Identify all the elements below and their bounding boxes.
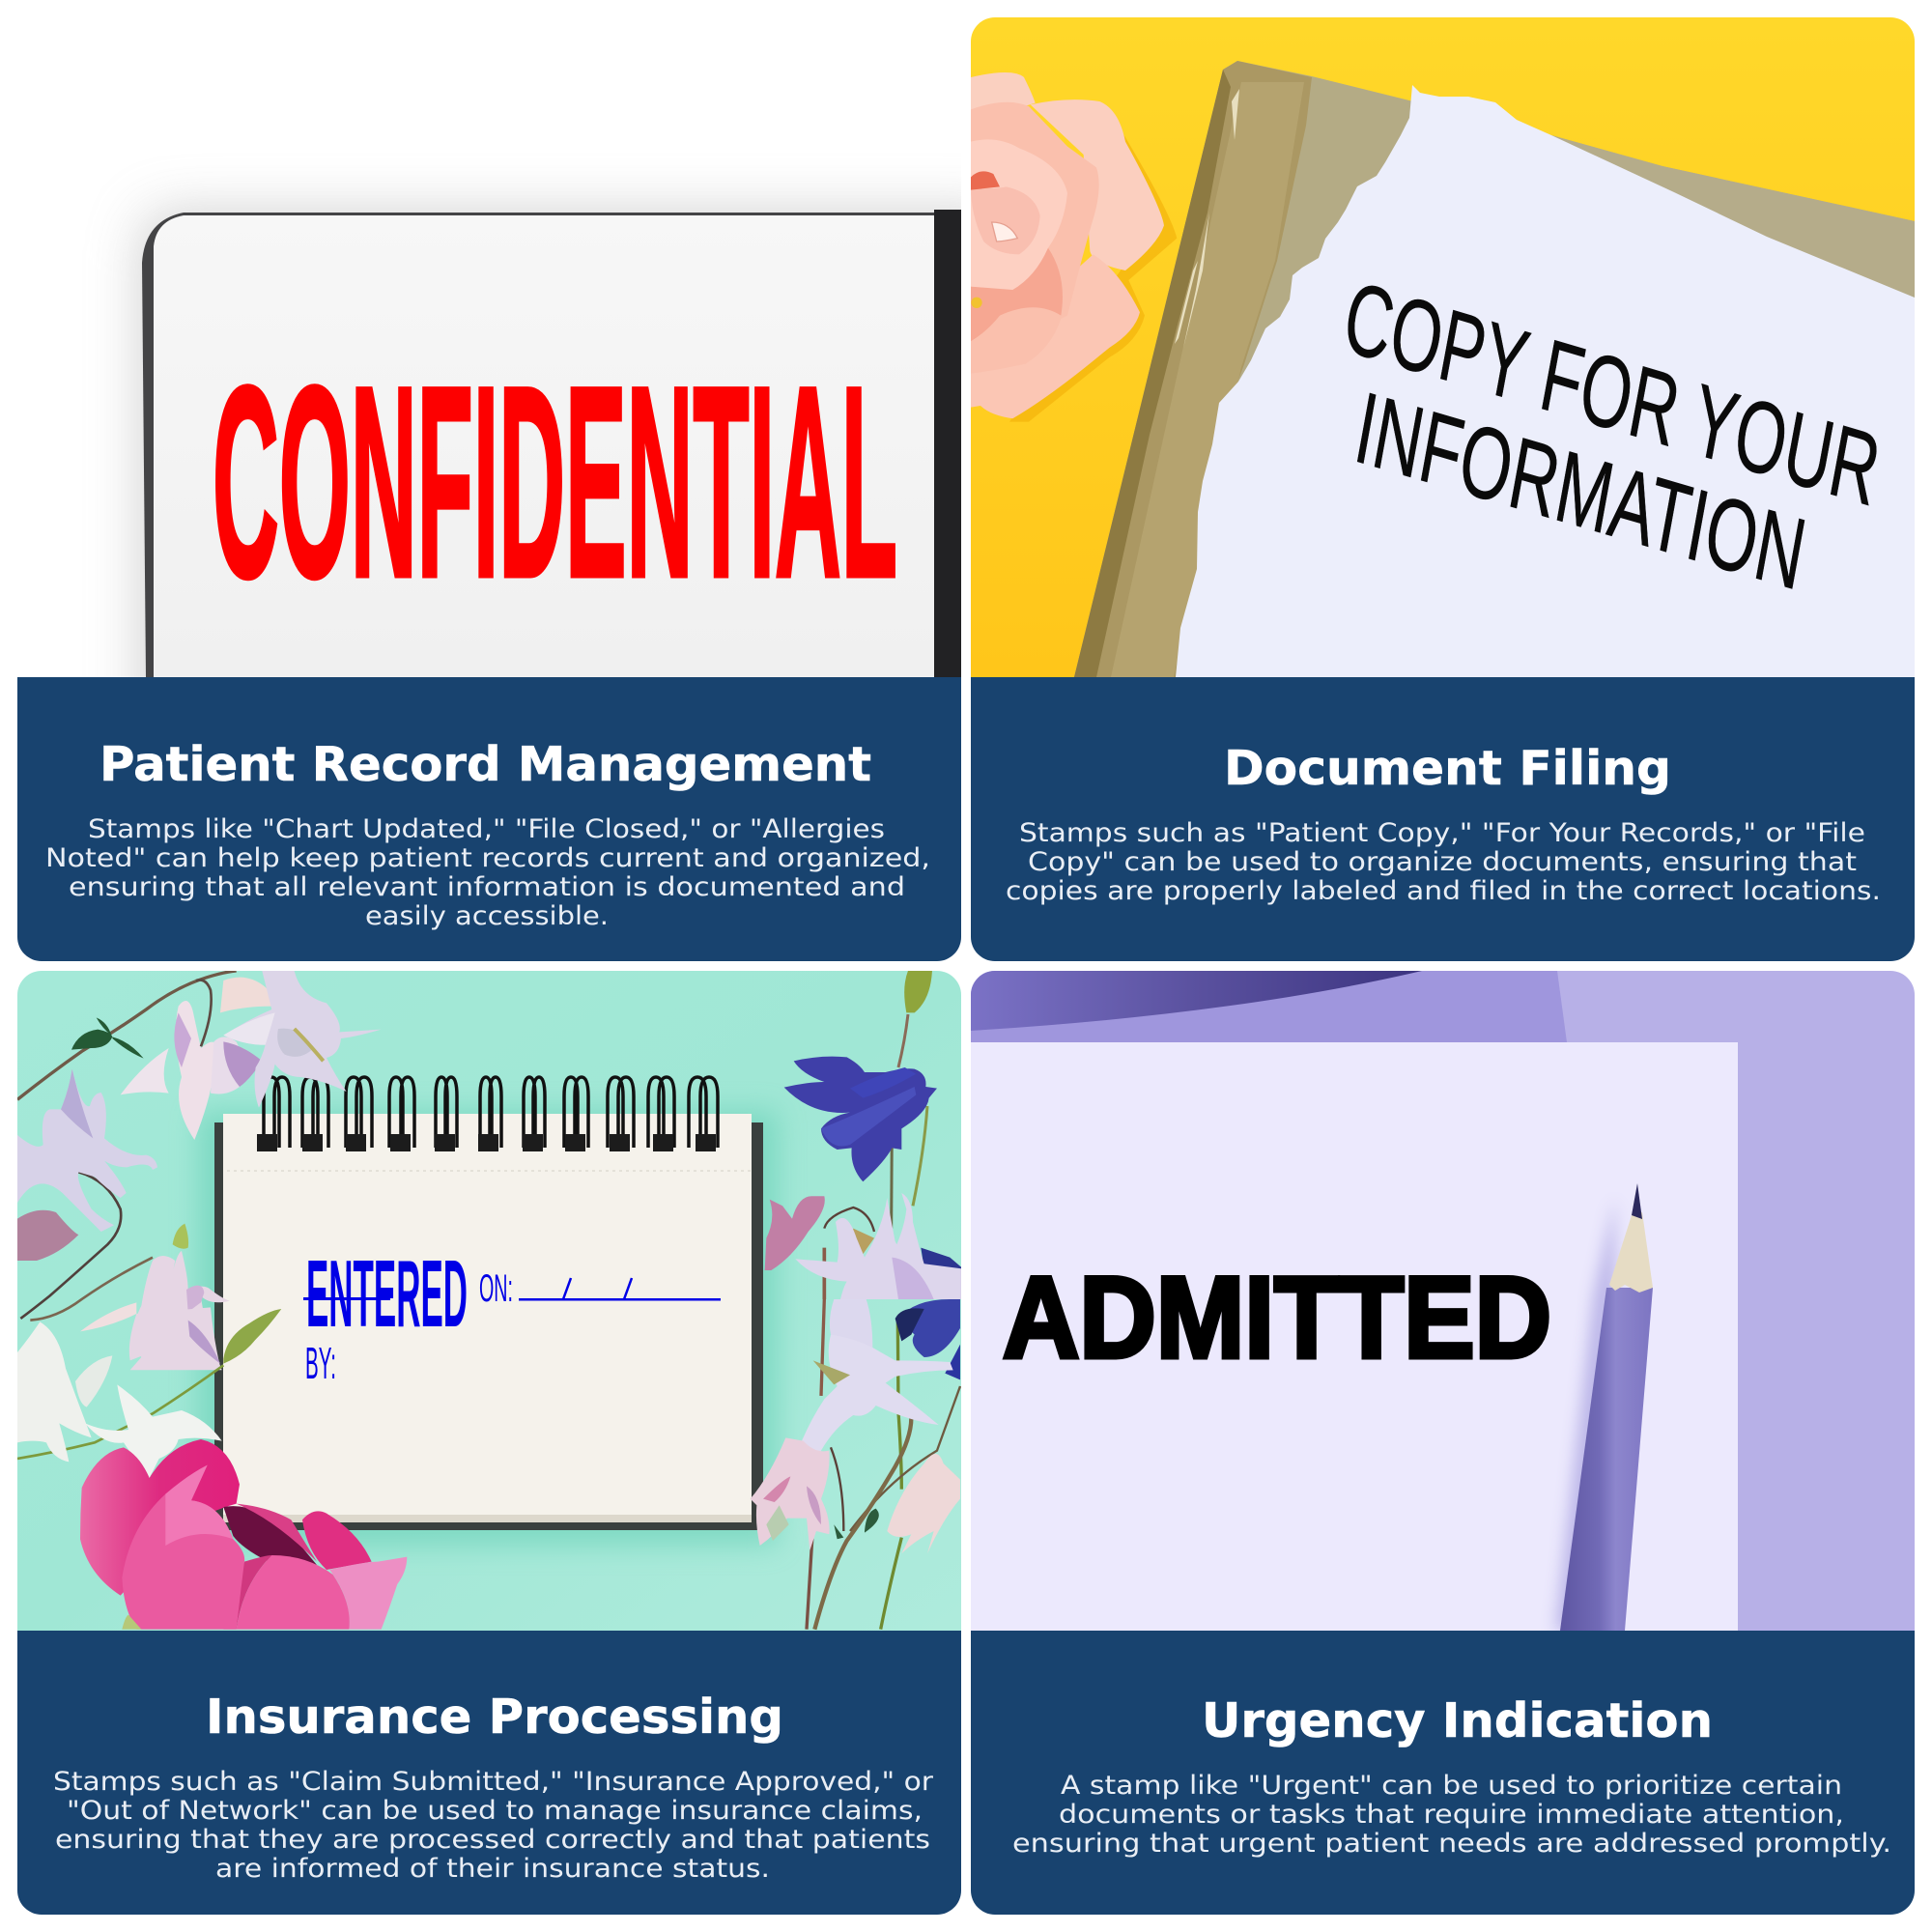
spiral rings: [264, 1077, 718, 1148]
caption card: [17, 677, 961, 961]
white sheet: [971, 1042, 1738, 1631]
purple card: [971, 971, 1567, 1042]
panel: urgency indication: [971, 971, 1915, 1915]
binding holes: [257, 1134, 716, 1151]
description: Stamps like "Chart Updated," "File Closed," or "Allergies: [88, 814, 885, 844]
stamp: entered on by: ENTERED: [306, 1240, 468, 1347]
stamp: entered on by: [303, 1261, 721, 1378]
heading: Insurance Processing: [206, 1690, 783, 1745]
notebook paper: [223, 1114, 752, 1522]
panel: patient record management: [17, 189, 961, 961]
stamp: entered on by: ON:: [479, 1267, 513, 1310]
heading: Patient Record Management: [99, 737, 871, 792]
flowers: right lower cluster: [751, 1299, 960, 1630]
flowers: upper left cluster: [17, 971, 382, 1321]
caption card: [971, 1631, 1915, 1915]
panel: insurance processing: [17, 971, 961, 1915]
description: ensuring that all relevant information is documented and: [69, 872, 905, 902]
description: [53, 1767, 934, 1884]
photo: torn paper on yellow: [971, 17, 1915, 677]
description: Noted" can help keep patient records current and organized,: [45, 843, 930, 873]
description: Stamps such as "Claim Submitted," "Insurance Approved," or: [53, 1767, 934, 1797]
board: [1074, 61, 1915, 677]
description: [45, 814, 930, 931]
notebook backing: [214, 1122, 763, 1530]
photo: spiral notebook with flowers: [17, 971, 961, 1631]
description: Copy" can be used to organize documents, ensuring that: [1028, 847, 1857, 877]
description: ensuring that they are processed correctly and that patients: [55, 1825, 930, 1855]
description: easily accessible.: [365, 901, 609, 931]
stamp: admitted: ADMITTED: [1003, 1253, 1551, 1382]
flower: pink peony: [80, 1439, 407, 1630]
description: [1006, 818, 1881, 906]
heading: Document Filing: [1224, 741, 1671, 796]
pencil: [1560, 1183, 1653, 1631]
description: are informed of their insurance status.: [215, 1854, 770, 1884]
description: "Out of Network" can be used to manage insurance claims,: [67, 1796, 923, 1826]
description: copies are properly labeled and filed in the correct locations.: [1006, 876, 1881, 906]
stamp: entered on by: BY:: [305, 1338, 336, 1388]
description: ensuring that urgent patient needs are addressed promptly.: [1012, 1829, 1891, 1859]
flower: mid left and green bud: [130, 1224, 230, 1370]
flowers: right upper cluster: [765, 971, 961, 1299]
rose: [971, 72, 1177, 422]
caption card: [17, 1631, 961, 1915]
description: documents or tasks that require immediate attention,: [1059, 1800, 1844, 1830]
flowers: lower left white cluster: [17, 1302, 281, 1478]
heading: Urgency Indication: [1202, 1693, 1713, 1748]
description: [1012, 1771, 1891, 1859]
caption card: [971, 677, 1915, 961]
pencil shadow: [1555, 1198, 1615, 1631]
description: Stamps such as "Patient Copy," "For Your Records," or "File: [1019, 818, 1865, 848]
photo: confidential notebook: [118, 189, 961, 677]
description: A stamp like "Urgent" can be used to prioritize certain: [1061, 1771, 1842, 1801]
photo: paper and purple pencil: [971, 971, 1915, 1631]
torn paper: [1176, 85, 1915, 677]
panel: document filing: [971, 17, 1915, 961]
